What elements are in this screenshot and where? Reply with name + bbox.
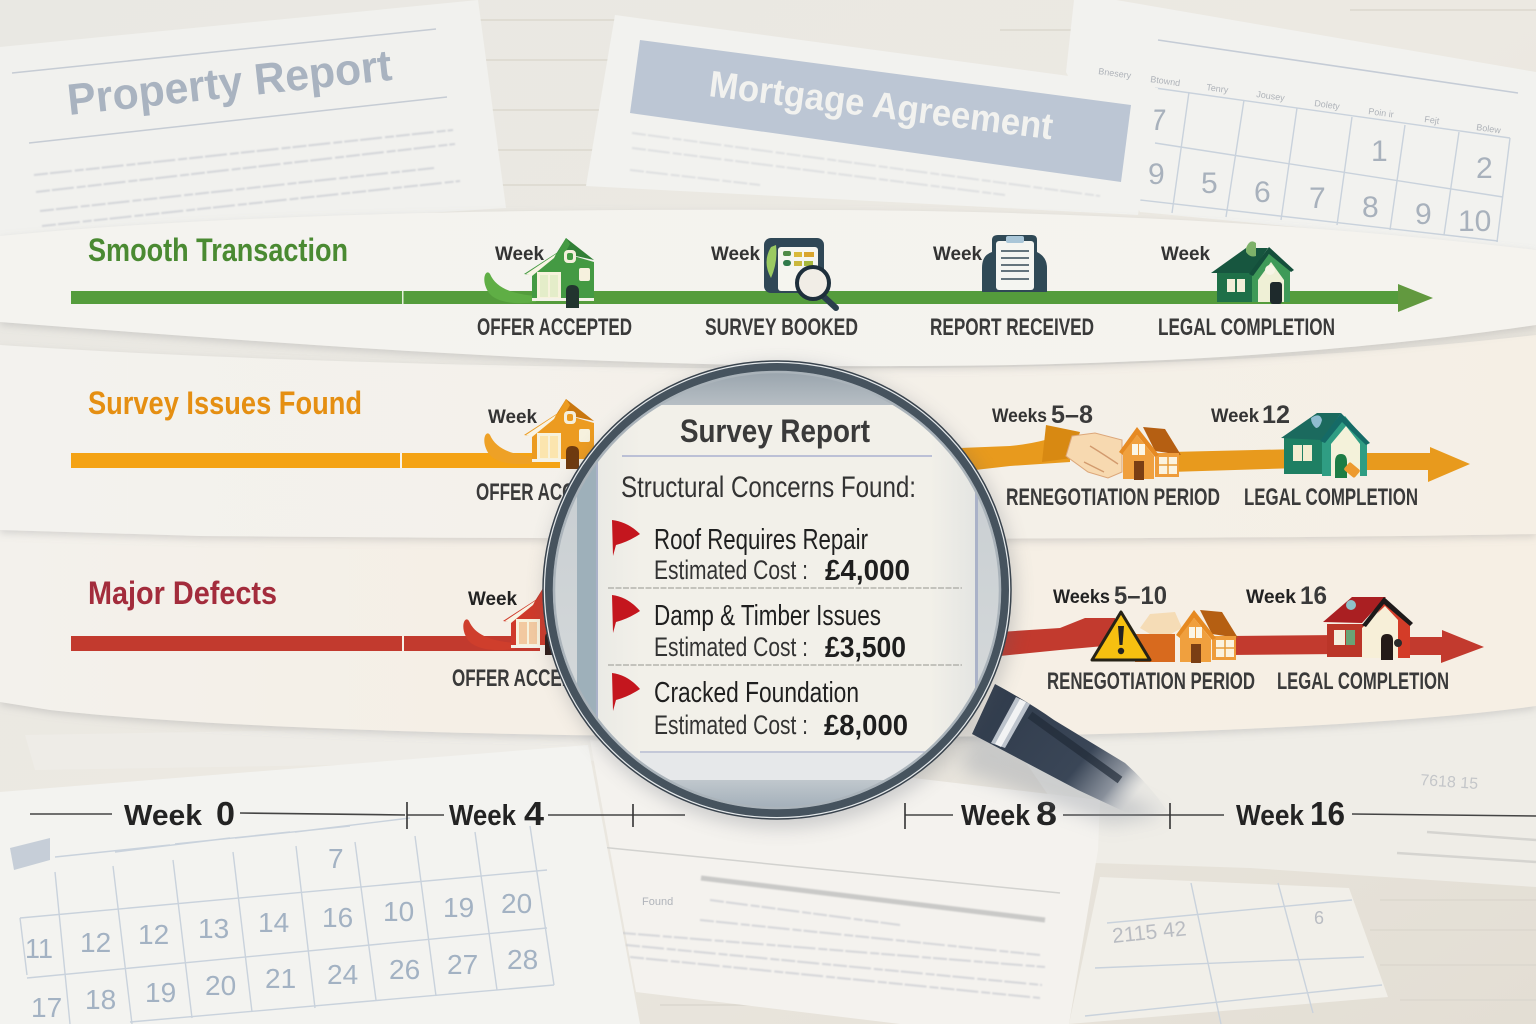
week label: Week [933, 244, 982, 265]
weeks label: Weeks [1053, 587, 1110, 608]
panel: smooth transaction band [0, 210, 1536, 366]
arrow line [71, 440, 1470, 482]
weeks label: Week [1246, 587, 1296, 608]
axis label [449, 795, 545, 832]
weekly axis [30, 795, 1536, 832]
calendar numbers: 20 [205, 970, 236, 1001]
calendar headers: Btownd [1150, 74, 1181, 88]
axis label [1236, 795, 1345, 832]
arrow line [71, 618, 1484, 663]
survey report sheet [577, 405, 978, 781]
document: property report [0, 0, 506, 240]
item: damp: Damp & Timber Issues [654, 600, 881, 632]
icon: red flag [612, 595, 640, 633]
document title: property report: Property Report [65, 41, 394, 125]
calendar numbers [25, 843, 538, 1023]
calendar numbers: 10 [383, 896, 414, 927]
calendar numbers: 21 [265, 963, 296, 994]
item: roof: £4,000 [825, 555, 910, 587]
icon: house with side [1176, 610, 1238, 663]
item: damp: £3,500 [825, 632, 906, 664]
calendar numbers: 27 [447, 949, 478, 980]
axis label: 8 [1036, 795, 1057, 832]
calendar numbers: 8 [1362, 191, 1379, 224]
axis label: Week [961, 800, 1031, 832]
item: roof: Estimated Cost : [654, 555, 808, 585]
weeks label [992, 401, 1093, 429]
item: foundation: Cracked Foundation [654, 677, 859, 709]
report subtitle: Structural Concerns Found: [621, 471, 916, 504]
ledger number: 6 [1314, 908, 1324, 928]
handle [972, 684, 1168, 814]
calendar headers: Bolew [1476, 122, 1502, 135]
document text fragment: Found [642, 896, 673, 908]
axis label: 0 [216, 795, 235, 832]
calendar numbers: 17 [31, 992, 62, 1023]
item: foundation [612, 673, 908, 742]
week label: Week [495, 244, 544, 265]
calendar numbers: 19 [145, 977, 176, 1008]
calendar numbers: 28 [507, 944, 538, 975]
label: OFFER ACCEPTED [452, 665, 607, 692]
icon: house teal [1281, 413, 1370, 478]
document: ledger bottom right [1069, 877, 1388, 1024]
icon: house green [484, 238, 594, 308]
calendar headers: Dolety [1314, 98, 1341, 112]
weeks label: 16 [1300, 582, 1327, 610]
axis label [961, 795, 1057, 832]
calendar headers: Fejt [1424, 114, 1440, 126]
document title: mortgage agreement: Mortgage Agreement [707, 63, 1055, 147]
label: LEGAL COMPLETION [1158, 314, 1335, 341]
week label: Week [711, 244, 760, 265]
magnifying glass [543, 361, 1168, 828]
icon: house red large [1323, 597, 1413, 660]
item: foundation: Estimated Cost : [654, 710, 808, 740]
document: paper right behind axis [1000, 705, 1536, 887]
document: wall calendar top right [1066, 0, 1536, 250]
icon: red flag [612, 520, 640, 556]
icon: clipboard report [982, 235, 1047, 292]
arrow line [71, 284, 1433, 312]
week label: Week [1161, 244, 1210, 265]
icon: house with side [1119, 427, 1181, 480]
panel: survey issues band [0, 335, 1536, 539]
weeks label: 5–10 [1114, 582, 1167, 610]
label: OFFER ACCEPTED [477, 314, 632, 341]
calendar numbers: 7 [1150, 104, 1167, 137]
axis label [124, 795, 235, 832]
label: OFFER ACCEPTED [476, 479, 631, 506]
weeks label [1053, 582, 1167, 610]
weeks label: 5–8 [1051, 401, 1093, 429]
calendar numbers: 6 [1254, 176, 1271, 209]
item: damp [612, 595, 906, 664]
calendar numbers: 9 [1148, 158, 1165, 191]
icon: house dark green [1211, 241, 1294, 304]
icon: red flag [612, 673, 640, 711]
document: calendar bottom left [0, 745, 640, 1024]
row 1: smooth transaction [71, 232, 1433, 341]
axis label: 4 [524, 795, 545, 832]
calendar numbers: 24 [327, 959, 358, 990]
calendar numbers: 7 [1309, 182, 1326, 215]
label: RENEGOTIATION PERIOD [1006, 484, 1220, 511]
item: foundation: £8,000 [824, 710, 908, 742]
item: roof [612, 520, 910, 587]
document: faint strip bottom left [25, 725, 640, 770]
calendar headers: Bnesery [1098, 66, 1132, 81]
week label: Week [468, 589, 517, 610]
icon: house orange [484, 399, 594, 469]
calendar numbers: 10 [1458, 205, 1491, 238]
weeks label [1246, 582, 1327, 610]
faded note: 7618 15 [1420, 772, 1479, 793]
calendar numbers: 18 [85, 984, 116, 1015]
calendar numbers: 16 [322, 902, 353, 933]
axis label: Week [124, 800, 203, 832]
calendar numbers: 14 [258, 907, 289, 938]
axis label: Week [449, 800, 517, 832]
calendar numbers: 13 [198, 913, 229, 944]
calendar headers: Tenry [1206, 82, 1229, 95]
heading: Major Defects [88, 575, 277, 611]
label: LEGAL COMPLETION [1244, 484, 1418, 511]
lens rim [543, 361, 1011, 819]
calendar numbers: 12 [138, 919, 169, 950]
panel: major defects band [0, 520, 1536, 737]
calendar headers: Poin ir [1368, 106, 1394, 120]
weeks label: Weeks [992, 406, 1047, 427]
label: LEGAL COMPLETION [1277, 668, 1449, 695]
heading: Smooth Transaction [88, 232, 348, 268]
week label: Week [488, 407, 537, 428]
weeks label: 12 [1262, 401, 1290, 429]
weeks label [1211, 401, 1290, 429]
weeks label: Week [1211, 406, 1259, 427]
icon: survey tablet with magnifier [764, 238, 836, 308]
ledger figures: 2115 42 [1111, 917, 1187, 948]
calendar numbers: 11 [25, 933, 53, 964]
calendar numbers: 7 [328, 843, 344, 874]
calendar numbers: 1 [1371, 135, 1388, 168]
calendar numbers: 9 [1415, 198, 1432, 231]
row 2: survey issues found [71, 385, 1470, 511]
calendar numbers [1148, 104, 1493, 238]
report title: Survey Report [680, 413, 870, 449]
row 3: major defects [71, 575, 1484, 695]
item: damp: Estimated Cost : [654, 632, 808, 662]
calendar headers [1098, 66, 1502, 135]
label: SURVEY BOOKED [705, 314, 858, 341]
item: roof: Roof Requires Repair [654, 524, 868, 556]
document: mortgage agreement [586, 15, 1158, 215]
calendar numbers: 26 [389, 954, 420, 985]
lens shadow [544, 364, 1016, 828]
calendar headers: Jousey [1256, 89, 1286, 103]
calendar numbers: 2 [1476, 152, 1493, 185]
calendar numbers: 12 [80, 927, 111, 958]
calendar numbers: 20 [501, 888, 532, 919]
icon: house red [463, 585, 573, 655]
axis label: 16 [1310, 795, 1345, 832]
axis label: Week [1236, 800, 1305, 832]
heading: Survey Issues Found [88, 385, 362, 421]
icon: hand and box behind warning [1135, 612, 1182, 662]
icon: warning triangle [1092, 612, 1150, 660]
calendar numbers: 5 [1201, 167, 1218, 200]
lens glass [553, 370, 1001, 810]
magnifier shadow [960, 720, 1165, 825]
icon: handshake [1042, 425, 1122, 478]
document: text page bottom centre [590, 740, 1100, 1024]
label: REPORT RECEIVED [930, 314, 1094, 341]
calendar numbers: 19 [443, 892, 474, 923]
label: RENEGOTIATION PERIOD [1047, 668, 1255, 695]
